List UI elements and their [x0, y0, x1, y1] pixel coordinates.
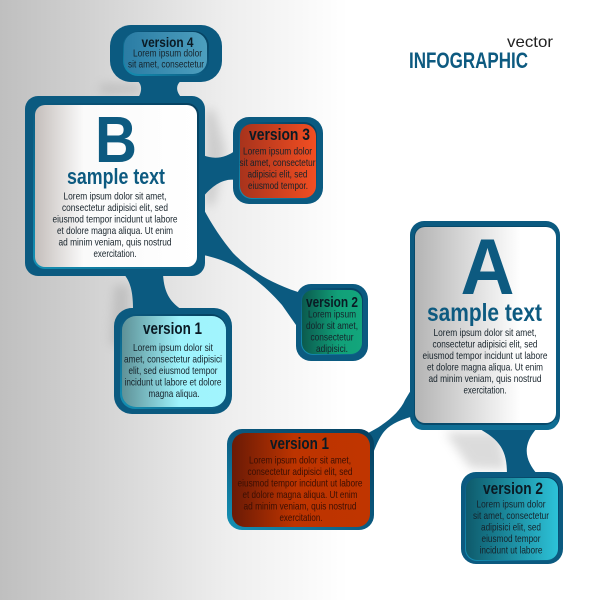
heading: version 1: version 1	[270, 434, 329, 453]
text: B body: exercitation.	[94, 248, 136, 260]
text: version 3 body: eiusmod tempor.	[248, 180, 308, 192]
connector: B to version 2	[203, 208, 300, 328]
letter: B: B	[95, 103, 137, 176]
text: version 2 body: dolor sit amet,	[306, 320, 358, 332]
heading: version 1: version 1	[143, 319, 202, 338]
panel: version 3	[233, 117, 323, 204]
panel: version 1 (blue)	[114, 308, 232, 414]
text: red version 1 body: ad minim veniam, quis nostrud	[244, 500, 357, 512]
text: teal version 2 body: incidunt ut labore	[480, 544, 543, 556]
text: teal version 2 body: Lorem ipsum dolor	[476, 498, 546, 510]
text: red version 1 body: eiusmod tempor incidunt ut labore	[238, 478, 363, 490]
text: version 2 body: consectetur	[310, 332, 354, 344]
title: vector	[507, 34, 554, 51]
title	[409, 34, 554, 73]
text: red version 1 body: et dolore magna aliqua. Ut enim	[242, 489, 358, 501]
panel: version 2 (green)	[296, 284, 368, 361]
heading: sample text: sample text	[427, 299, 543, 327]
text: red version 1 body: Lorem ipsum dolor sit amet,	[249, 454, 351, 466]
text: teal version 2 body: adipisici elit, sed	[481, 522, 541, 534]
panel: A	[410, 221, 560, 430]
text: B body: eiusmod tempor incidunt ut labore	[52, 214, 178, 226]
heading: sample text: sample text	[67, 164, 166, 189]
text: A body: ad minim veniam, quis nostrud	[428, 373, 542, 385]
connector: B to version 1	[124, 274, 182, 310]
text: red version 1 body: exercitation.	[280, 512, 322, 524]
text: version 2 body: Lorem ipsum	[308, 308, 356, 320]
text: A body	[422, 327, 548, 396]
text: version 2 body: adipisici.	[316, 343, 348, 355]
drop shadows	[100, 84, 507, 470]
heading: version 2: version 2	[483, 479, 543, 498]
text: version 1 body: elit, sed eiusmod tempor	[128, 365, 218, 377]
text: A body: eiusmod tempor incidunt ut labore	[422, 350, 548, 362]
text: version 3 body: adipisici elit, sed	[248, 168, 308, 180]
text: version 1 body: Lorem ipsum dolor sit	[133, 342, 213, 354]
text: version 1 body: incidunt ut labore et dolore	[124, 376, 222, 388]
text: version 1 body	[124, 342, 222, 400]
text: B body: consectetur adipisici elit, sed	[62, 202, 168, 214]
connector: version 4 to B	[136, 80, 182, 98]
text: A body: Lorem ipsum dolor sit amet,	[434, 327, 536, 339]
panel: version 1 (red)	[227, 429, 374, 530]
connector: B to version 3	[203, 150, 236, 197]
panel: B	[25, 96, 205, 276]
text: A body: exercitation.	[464, 384, 506, 396]
text: red version 1 body: consectetur adipisici elit, sed	[248, 466, 353, 478]
text: teal version 2 body: eiusmod tempor	[482, 533, 541, 545]
connector: A to version 1	[366, 385, 414, 456]
heading: version 2: version 2	[306, 295, 358, 311]
text: version 3 body: Lorem ipsum dolor	[243, 146, 312, 158]
text: B body: ad minim veniam, quis nostrud	[58, 236, 172, 248]
text: version 4 body: Lorem ipsum dolor	[133, 48, 202, 60]
text: B body: Lorem ipsum dolor sit amet,	[64, 190, 166, 202]
text: teal version 2 body: sit amet, consectetur	[473, 510, 549, 522]
text: version 1 body: magna aliqua.	[148, 388, 200, 400]
text: version 3 body	[240, 146, 316, 192]
heading: version 4: version 4	[142, 34, 194, 50]
text: version 3 body: sit amet, consectetur	[240, 157, 316, 169]
text: version 4 body	[128, 48, 204, 70]
text: version 1 body: amet, consectetur adipisici	[124, 354, 222, 366]
heading: version 3: version 3	[249, 125, 310, 144]
text: version 2 body	[306, 308, 358, 355]
title: INFOGRAPHIC	[409, 48, 528, 73]
text: A body: et dolore magna aliqua. Ut enim	[427, 362, 543, 374]
panel: version 4	[110, 25, 222, 82]
connector: A to version 2	[478, 428, 537, 474]
panel: version 2 (teal)	[461, 472, 563, 564]
text: version 4 body: sit amet, consectetur	[128, 58, 204, 70]
text: B body	[52, 190, 178, 260]
letter: A: A	[460, 222, 514, 311]
text: A body: consectetur adipisici elit, sed	[432, 338, 538, 350]
text: red version 1 body	[238, 454, 363, 524]
text: B body: et dolore magna aliqua. Ut enim	[57, 225, 173, 237]
text: teal version 2 body	[473, 498, 549, 556]
